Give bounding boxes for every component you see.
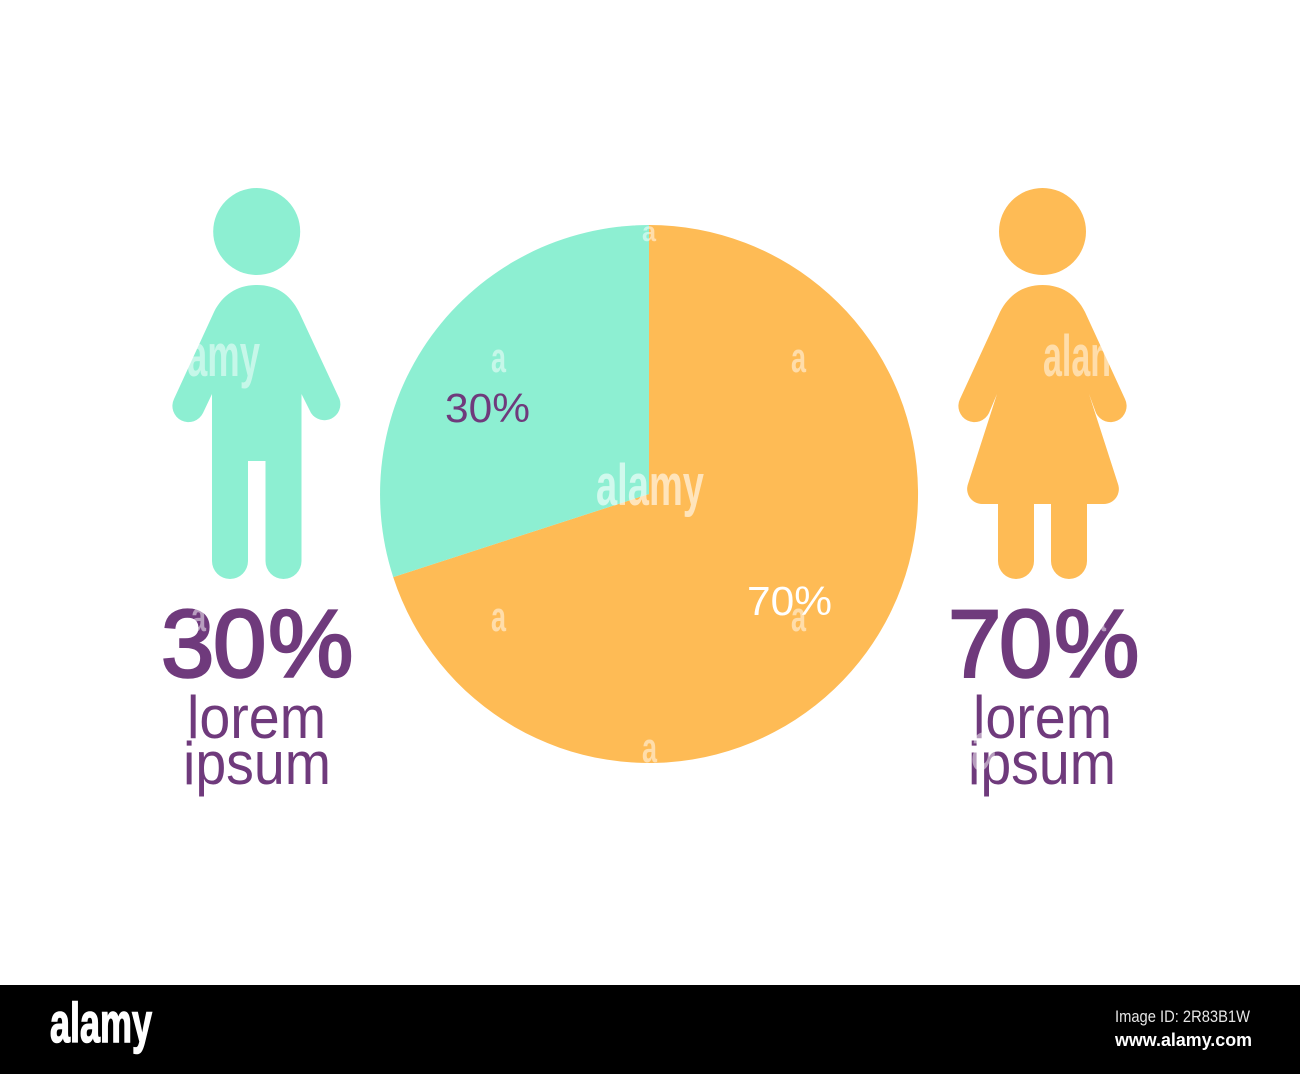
watermark on male figure: amy (187, 322, 260, 389)
footer bar (0, 985, 1300, 1074)
small watermark marks: a (491, 334, 506, 381)
small watermark marks: a (791, 593, 806, 640)
left statistic: 30% lorem ipsum (161, 590, 353, 797)
pie label: 30%: 30% (445, 385, 530, 431)
small watermark marks: a (642, 216, 656, 247)
pie chart (380, 225, 918, 763)
website: www.alamy.com (1114, 1030, 1252, 1050)
caption line: ipsum: ipsum (968, 730, 1116, 797)
big number 30%: 30% (161, 590, 353, 698)
watermark on female figure: alan (1043, 324, 1111, 389)
pie slice: 30% teal (380, 225, 649, 577)
small watermark marks: a (191, 593, 206, 640)
pie slice: 70% orange (393, 225, 918, 763)
female figure icon (958, 188, 1127, 579)
small watermark marks (191, 216, 1106, 785)
watermarks (187, 216, 1111, 785)
caption line: ipsum: ipsum (183, 730, 331, 797)
footer logo: alamy (50, 991, 152, 1054)
image id: Image ID: 2R83B1W (1115, 1007, 1250, 1026)
pie label: 70%: 70% (747, 578, 832, 624)
small watermark marks: a (971, 707, 999, 785)
small watermark marks: a (791, 334, 806, 381)
center watermark: alamy (596, 453, 704, 518)
small watermark marks: a (642, 724, 657, 771)
right statistic: 70% lorem ipsum (948, 590, 1139, 797)
small watermark marks: a (491, 593, 506, 640)
caption line: lorem: lorem (187, 684, 326, 751)
male figure icon (172, 188, 340, 579)
big number 70%: 70% (948, 590, 1139, 698)
small watermark marks: a (1091, 593, 1106, 640)
caption line: lorem: lorem (973, 684, 1112, 751)
